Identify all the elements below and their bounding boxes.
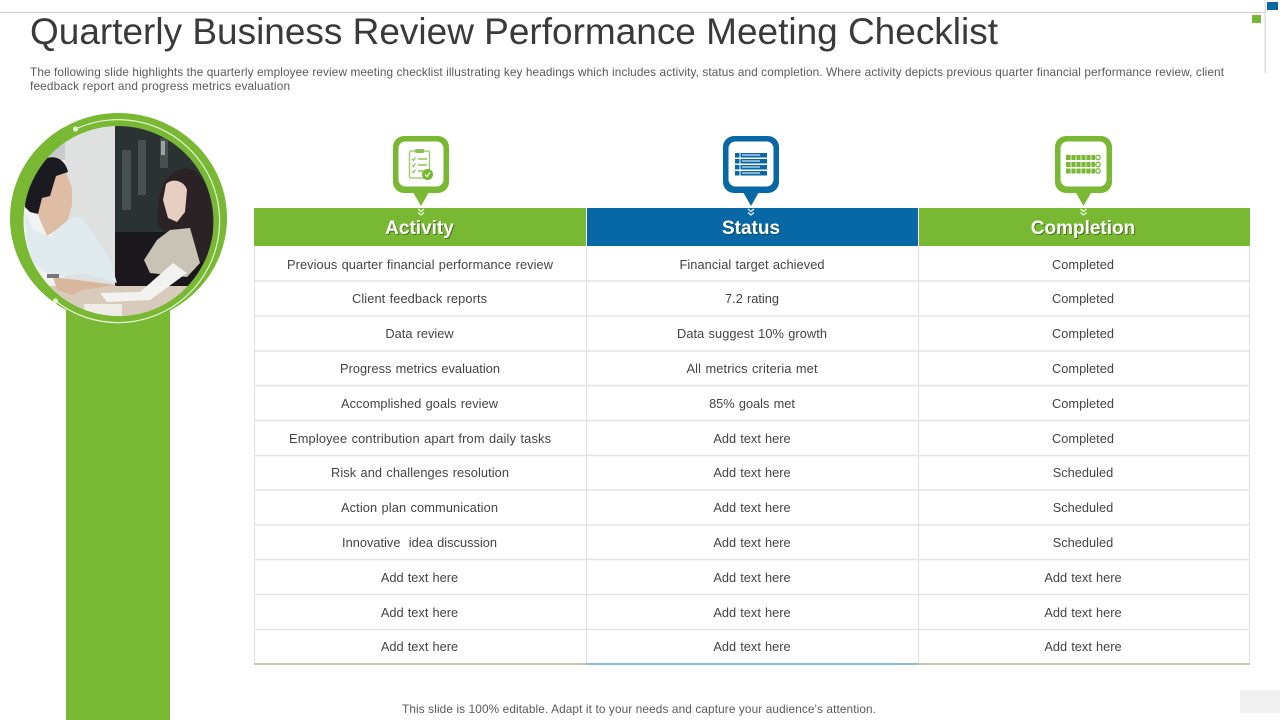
ring dots <box>53 126 78 304</box>
table grid <box>254 246 1250 664</box>
green ring <box>10 113 227 323</box>
column: Activity values: Data review <box>385 326 454 341</box>
column: Status values: Add text here <box>713 570 791 585</box>
table <box>49 286 188 316</box>
column: Completion values: Add text here <box>1044 639 1122 654</box>
decorative square: blue <box>1267 2 1278 10</box>
column: Activity values: Innovative idea discussion <box>342 535 497 550</box>
white thin arc <box>56 120 220 323</box>
column: Completion values: Completed <box>1052 257 1114 272</box>
intro text <box>30 65 1225 93</box>
column: Completion values: Completed <box>1052 326 1114 341</box>
column header: Activity <box>254 208 586 246</box>
column: Activity values: Add text here <box>381 570 458 585</box>
column: Activity values: Progress metrics evaluation <box>340 361 500 376</box>
icon: activity clipboard pin <box>393 136 449 215</box>
column: Activity values: Add text here <box>381 639 458 654</box>
column: Completion values <box>1044 257 1122 654</box>
column: Completion values: Scheduled <box>1053 465 1113 480</box>
column header: Status: Status <box>722 218 780 239</box>
column: Completion values: Completed <box>1052 396 1114 411</box>
title: Quarterly Business Review Performance Meeting Checklist <box>30 11 999 52</box>
column: Status values: Financial target achieved <box>680 257 824 272</box>
column header: Status <box>587 208 918 246</box>
open book <box>100 263 187 302</box>
column: Activity values: Employee contribution apart from daily tasks <box>289 431 551 446</box>
column: Status values: All metrics criteria met <box>686 361 818 376</box>
column: Status values: 7.2 rating <box>725 291 779 306</box>
woman <box>158 168 213 262</box>
column: Completion values: Add text here <box>1044 570 1122 585</box>
column: Completion values: Completed <box>1052 431 1114 446</box>
column: Status values: Add text here <box>713 605 791 620</box>
column: Status values: Add text here <box>713 431 791 446</box>
table <box>254 208 1250 664</box>
footer note: This slide is 100% editable. Adapt it to your needs and capture your audience's attention. <box>402 702 876 716</box>
column: Status values: Data suggest 10% growth <box>677 326 827 341</box>
icon: status list pin <box>723 136 779 215</box>
column header: Completion: Completion <box>1031 218 1135 239</box>
column: Status values: 85% goals met <box>709 396 795 411</box>
column header: Completion <box>919 208 1250 246</box>
column: Activity values: Client feedback reports <box>352 291 487 306</box>
column: Activity values: Accomplished goals review <box>341 396 499 411</box>
column: Status values: Add text here <box>713 535 791 550</box>
column: Completion values: Scheduled <box>1053 535 1113 550</box>
icon: completion progress pin <box>1055 136 1112 215</box>
green column under photo <box>66 300 170 720</box>
column: Status values: Add text here <box>713 639 791 654</box>
intro text: The following slide highlights the quarterly employee review meeting checklist illustrating key headings which includes activity, status and completion. Where activity depicts previous quarter financial performance review, client <box>30 65 1225 79</box>
column: Activity values: Action plan communication <box>341 500 498 515</box>
column header: Activity: Activity <box>385 218 454 239</box>
column: Activity values: Risk and challenges resolution <box>331 465 509 480</box>
column: Activity values <box>287 257 554 654</box>
photo: two colleagues at a table <box>24 126 214 316</box>
column: Status values: Add text here <box>713 465 791 480</box>
decorative square: green <box>1252 15 1261 23</box>
column: Activity values: Add text here <box>381 605 458 620</box>
grey corner box <box>1240 690 1280 713</box>
intro text: feedback report and progress metrics evaluation <box>30 79 290 93</box>
column: Status values <box>677 257 827 654</box>
man <box>24 210 117 283</box>
column: Completion values: Add text here <box>1044 605 1122 620</box>
column: Completion values: Scheduled <box>1053 500 1113 515</box>
column: Completion values: Completed <box>1052 361 1114 376</box>
column: Completion values: Completed <box>1052 291 1114 306</box>
column: Status values: Add text here <box>713 500 791 515</box>
photo medallion <box>10 113 227 323</box>
column: Activity values: Previous quarter financial performance review <box>287 257 554 272</box>
